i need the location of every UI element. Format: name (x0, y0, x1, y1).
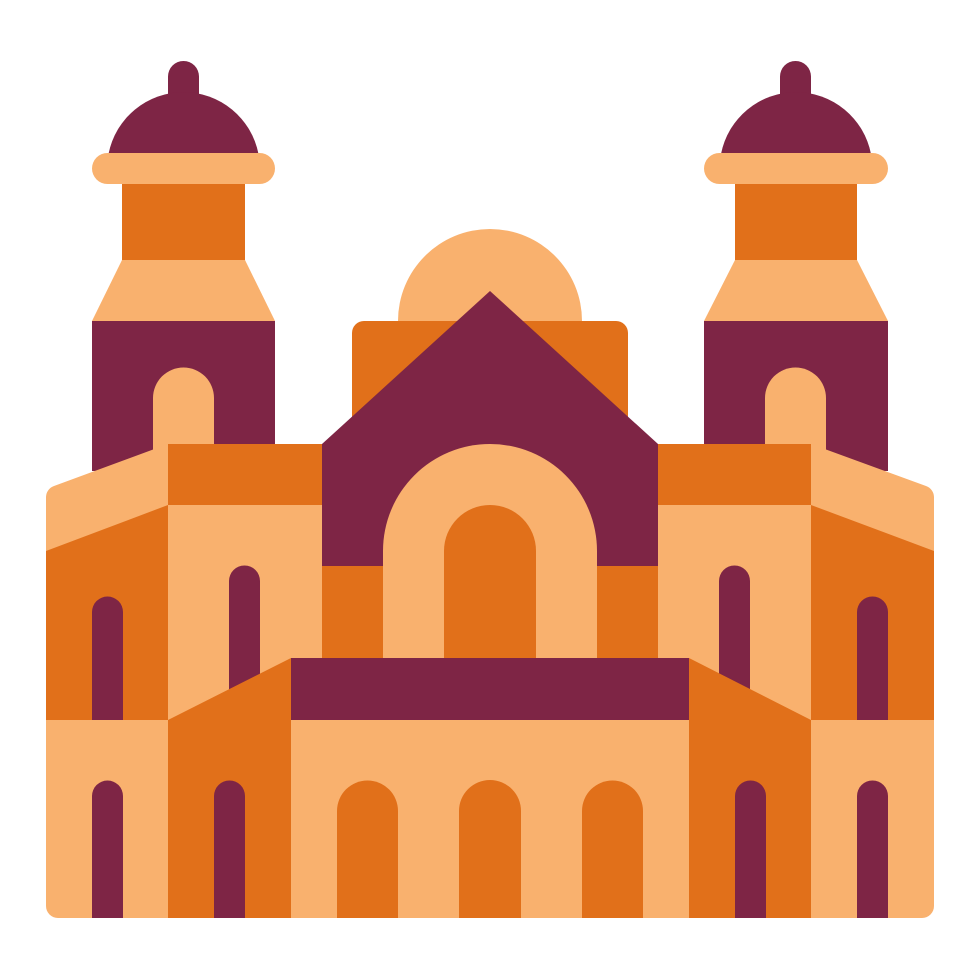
left tower window (153, 368, 214, 450)
left tower (92, 61, 275, 471)
right lower wall (811, 720, 934, 918)
gable door (444, 505, 536, 660)
left slanted block (168, 658, 291, 918)
right wing roof (658, 444, 934, 552)
right wing roof band (658, 444, 811, 505)
left tower shaft (122, 180, 245, 262)
left wing inner wall (168, 505, 322, 720)
gable arch (383, 444, 597, 660)
left wing (46, 444, 322, 720)
central lower wall (291, 720, 689, 918)
right wing outer window (857, 596, 888, 720)
central gable (322, 291, 658, 666)
lower window 2 (214, 780, 245, 918)
right wing inner window (719, 566, 750, 700)
left tower cornice (92, 153, 275, 184)
lower facade (46, 658, 934, 918)
arcade arch 2 (459, 780, 521, 918)
gable roof (322, 291, 658, 570)
lower window 3 (735, 780, 766, 918)
right slanted block (689, 658, 811, 918)
left tower finial (168, 61, 199, 111)
left lower wall (46, 720, 168, 918)
right tower dome (721, 92, 871, 154)
central dome (398, 229, 582, 325)
left tower sloped band (92, 260, 275, 321)
left wing roof (46, 444, 322, 552)
left tower dome (108, 92, 258, 154)
right tower shaft (735, 180, 857, 262)
lower window 1 (92, 781, 123, 918)
right tower cornice (704, 153, 888, 184)
left wing outer wall (46, 505, 168, 720)
right tower window (765, 368, 826, 450)
right tower sloped band (704, 260, 888, 321)
right wing (658, 444, 934, 720)
right tower base (704, 321, 888, 471)
right wing outer wall (811, 505, 934, 720)
left wing inner window (229, 566, 260, 700)
right tower finial (780, 61, 811, 111)
right wing inner wall (658, 505, 811, 720)
arcade arch 3 (582, 780, 643, 918)
gable lower wall (322, 566, 658, 666)
lower roof band (291, 658, 689, 720)
left tower base (92, 321, 275, 471)
right tower (704, 61, 888, 471)
arcade arch 1 (337, 780, 398, 918)
left wing outer window (92, 597, 123, 720)
central drum (352, 321, 628, 420)
lower window 4 (857, 780, 888, 918)
left wing roof band (168, 444, 322, 505)
